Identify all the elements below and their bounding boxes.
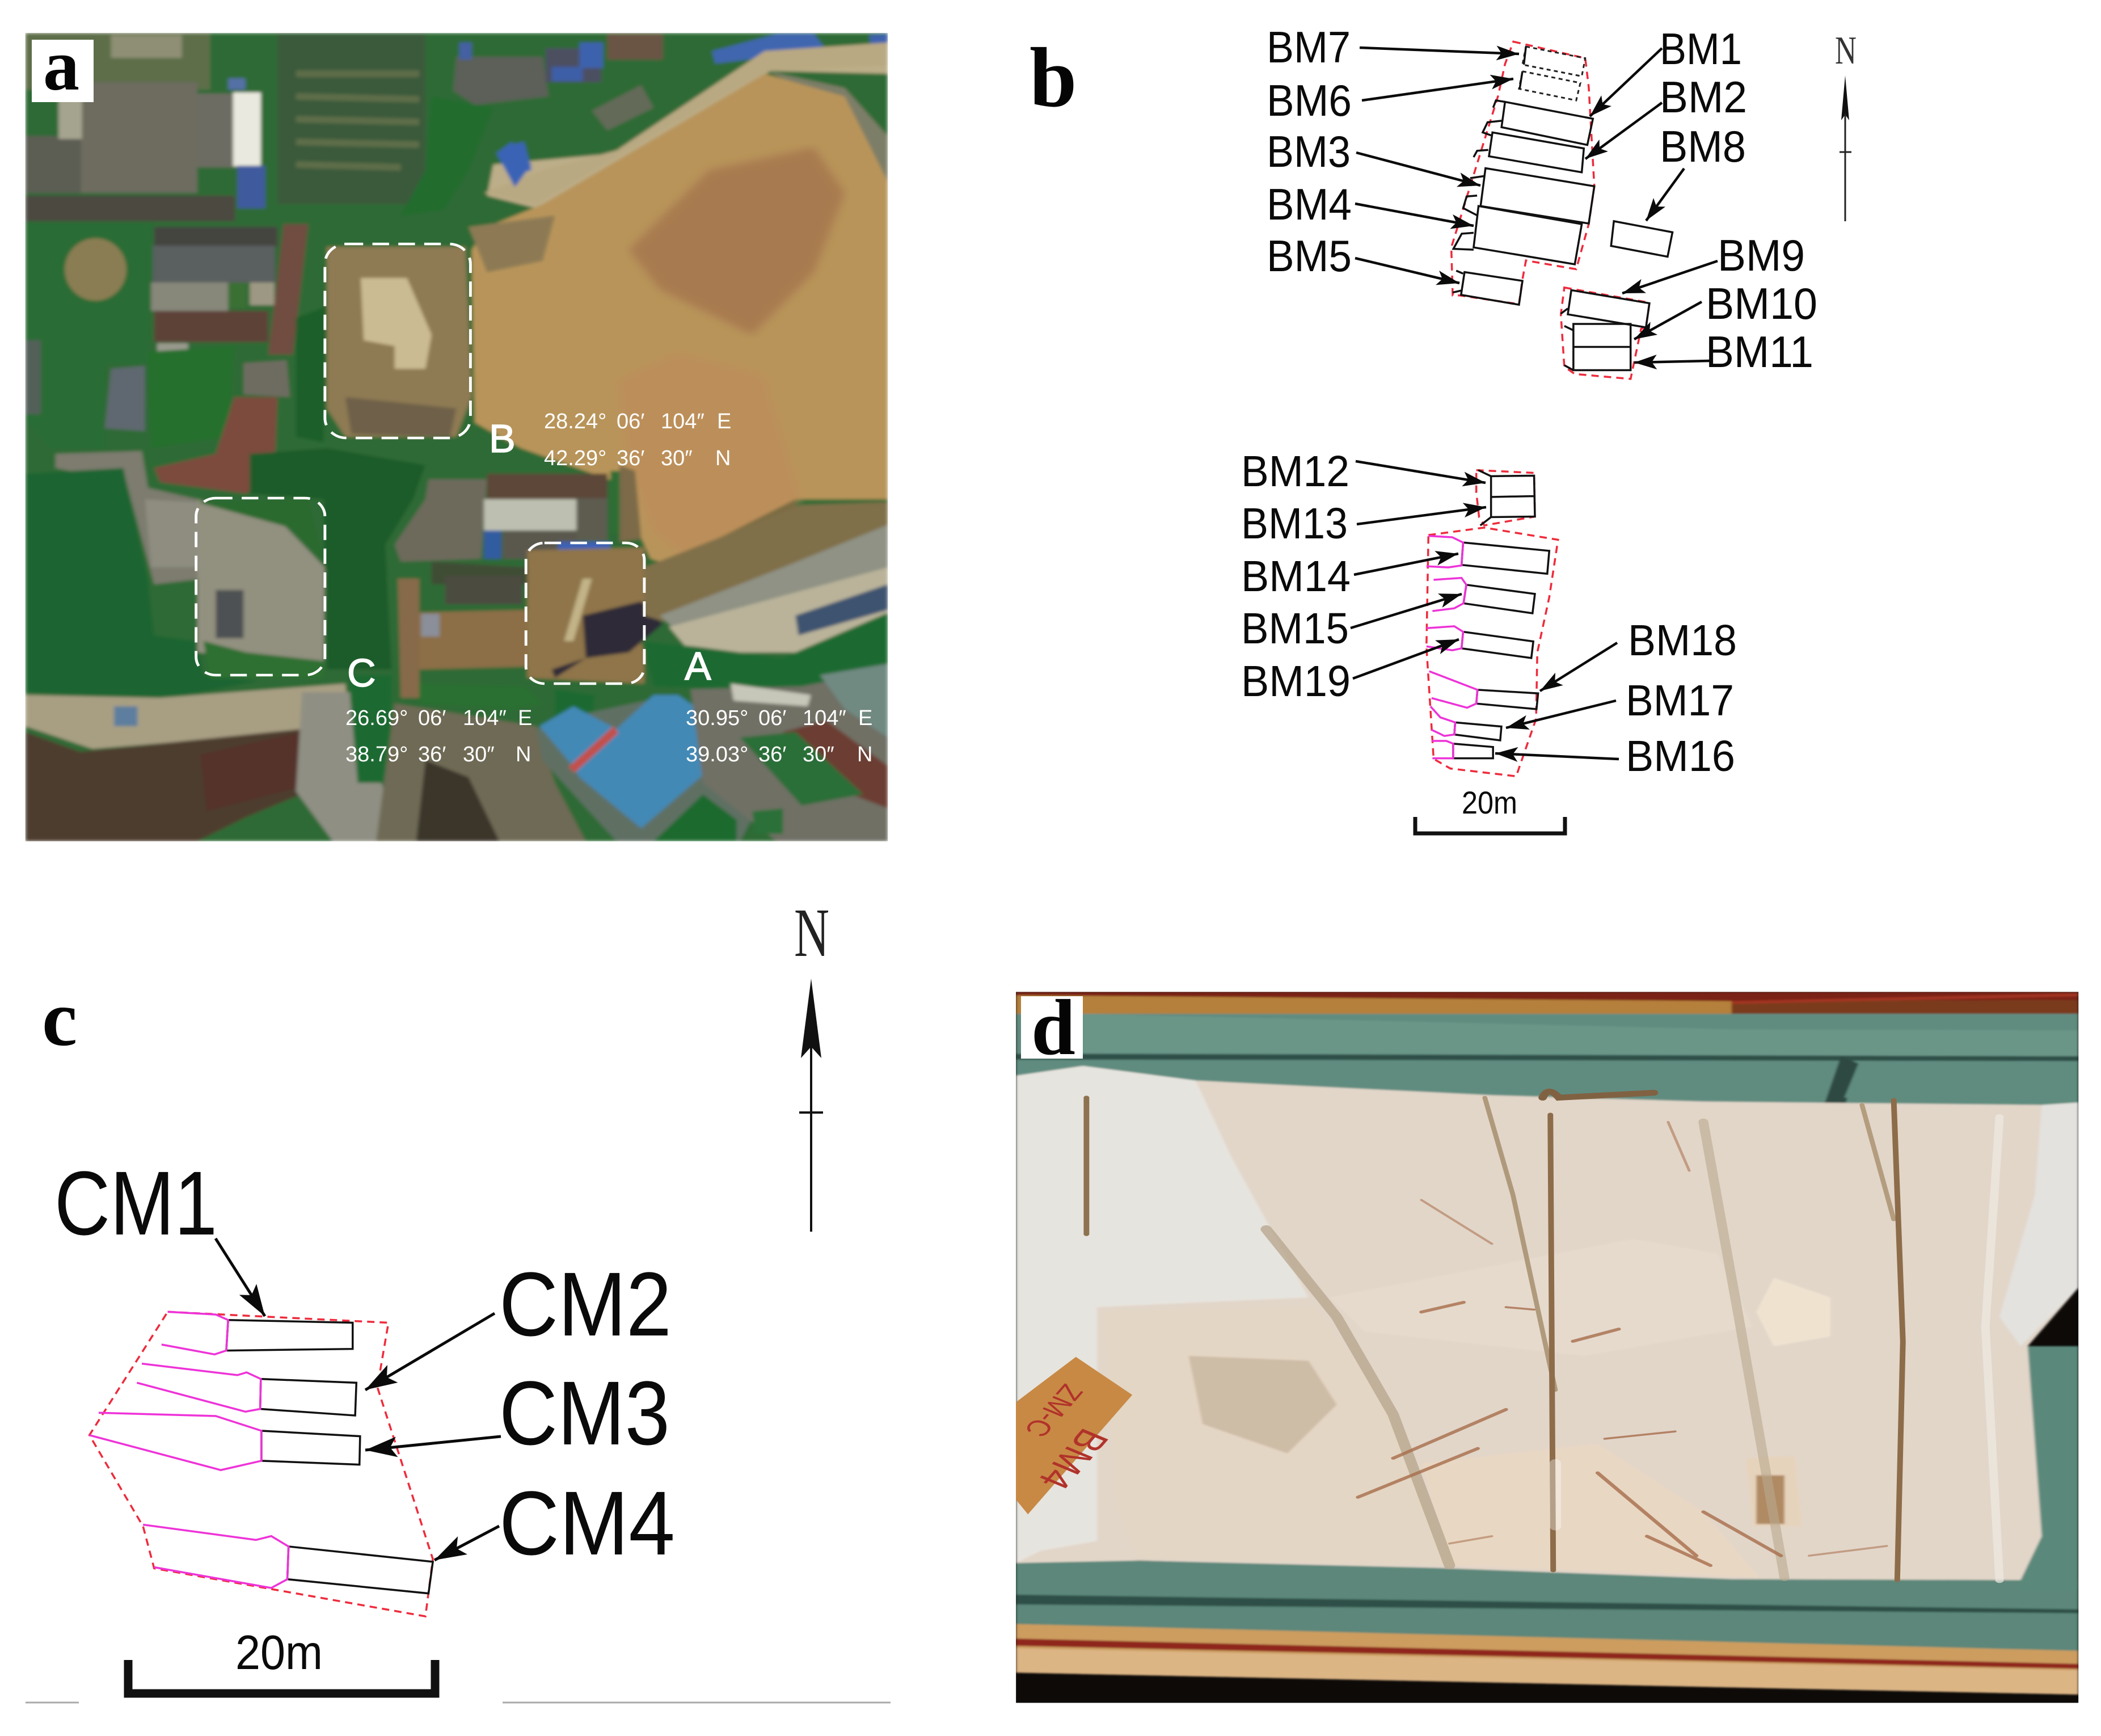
photograph xyxy=(1016,992,2078,1703)
plan: CM tombs xyxy=(90,1312,433,1616)
site B label and coordinates: E xyxy=(717,410,731,433)
scale bar c xyxy=(128,1626,435,1693)
BM labels lower group: BM17 xyxy=(1626,676,1734,725)
site A label and coordinates: E xyxy=(858,706,872,730)
panel letter c: c xyxy=(42,975,77,1063)
site B label and coordinates: 06′ xyxy=(617,410,644,433)
site C label and coordinates: N xyxy=(516,743,531,766)
BM labels upper right: BM11 xyxy=(1706,327,1813,377)
label box d: d xyxy=(1031,984,1075,1072)
label box a xyxy=(32,25,94,106)
site B label and coordinates: N xyxy=(715,446,731,470)
panel d: wrapped specimen photograph xyxy=(1016,984,2078,1703)
BM labels upper left: BM5 xyxy=(1267,231,1352,281)
site C label and coordinates: 36′ xyxy=(418,743,446,766)
BM labels lower group: BM15 xyxy=(1241,604,1349,653)
CM labels xyxy=(54,1152,675,1574)
BM labels upper right: BM8 xyxy=(1660,121,1746,171)
site A label and coordinates: 30″ xyxy=(803,743,834,766)
BM labels lower group xyxy=(1241,447,1737,781)
site C label and coordinates: C xyxy=(347,651,376,695)
scale bar b xyxy=(1415,785,1565,833)
scale bar b: 20m xyxy=(1462,785,1517,820)
CM labels: CM2 xyxy=(499,1253,672,1355)
BM labels upper left: BM4 xyxy=(1267,179,1352,229)
site C label and coordinates xyxy=(345,651,532,766)
site C label and coordinates: 06′ xyxy=(418,706,446,730)
site A label and coordinates: 39.03° xyxy=(686,743,748,766)
BM labels lower group: BM18 xyxy=(1628,616,1737,665)
site B label and coordinates xyxy=(489,410,731,470)
BM labels upper right: BM10 xyxy=(1706,279,1817,328)
north arrow c: N xyxy=(794,895,829,971)
site A label and coordinates: 104″ xyxy=(803,706,846,730)
site C label and coordinates: E xyxy=(518,706,532,730)
CM labels: CM1 xyxy=(54,1152,217,1254)
north arrow b xyxy=(1835,29,1857,221)
north arrow c xyxy=(794,895,829,1232)
BM labels upper right: BM2 xyxy=(1660,72,1747,122)
CM arrows xyxy=(216,1238,501,1560)
panel a: satellite map xyxy=(26,25,888,841)
site C label and coordinates: 30″ xyxy=(463,743,495,766)
site C label and coordinates: 38.79° xyxy=(345,743,408,766)
panel c: tomb plan xyxy=(26,895,891,1703)
site C label and coordinates: 26.69° xyxy=(345,706,408,730)
satellite image xyxy=(26,33,888,841)
baseline rules xyxy=(26,1702,891,1703)
BM labels upper left: BM7 xyxy=(1267,22,1351,72)
site A label and coordinates: N xyxy=(857,743,872,766)
site A label and coordinates: 06′ xyxy=(758,706,786,730)
wooden tag: ZM-C xyxy=(1018,1380,1090,1441)
wrapping ropes and tape xyxy=(1086,1092,1999,1580)
wooden tag xyxy=(1016,1357,1132,1514)
site B label and coordinates: 104″ xyxy=(661,410,704,433)
panel b: tomb plan xyxy=(1030,22,1857,833)
BM labels upper right: BM1 xyxy=(1660,24,1742,74)
BM labels lower group: BM16 xyxy=(1626,732,1735,781)
BM labels upper left xyxy=(1267,22,1352,281)
site B label and coordinates: B xyxy=(489,416,516,461)
site A label and coordinates: 30.95° xyxy=(686,706,748,730)
site C label and coordinates: 104″ xyxy=(463,706,507,730)
CM labels: CM4 xyxy=(499,1472,675,1574)
north arrow b: N xyxy=(1835,29,1857,73)
plan: upper tomb group BM1 to BM11 xyxy=(1452,41,1672,379)
BM labels upper right: BM9 xyxy=(1718,230,1805,280)
BM labels lower group: BM14 xyxy=(1241,552,1351,601)
site A label and coordinates xyxy=(685,644,872,766)
dashed site boundaries xyxy=(196,244,644,684)
site A label and coordinates: A xyxy=(685,644,711,688)
site A label and coordinates: 36′ xyxy=(758,743,786,766)
BM labels lower group: BM12 xyxy=(1241,447,1349,496)
label box a: a xyxy=(43,25,79,106)
site B label and coordinates: 42.29° xyxy=(544,446,606,470)
arrows upper group xyxy=(1355,48,1718,363)
site B label and coordinates: 28.24° xyxy=(544,410,606,433)
scale bar c: 20m xyxy=(235,1626,323,1680)
BM labels lower group: BM19 xyxy=(1241,657,1351,706)
site B label and coordinates: 30″ xyxy=(661,446,693,470)
arrows lower group xyxy=(1351,461,1619,759)
BM labels upper left: BM3 xyxy=(1267,127,1351,176)
site B label and coordinates: 36′ xyxy=(617,446,644,470)
BM labels upper left: BM6 xyxy=(1267,75,1352,125)
plan: lower tomb group BM12 to BM19 xyxy=(1427,470,1558,776)
BM labels upper right xyxy=(1660,24,1817,377)
wooden tag: BM4 xyxy=(1028,1423,1117,1495)
panel letter b: b xyxy=(1030,31,1077,125)
BM labels lower group: BM13 xyxy=(1241,499,1348,548)
CM labels: CM3 xyxy=(499,1362,670,1464)
soil streaks xyxy=(1358,1122,1887,1565)
